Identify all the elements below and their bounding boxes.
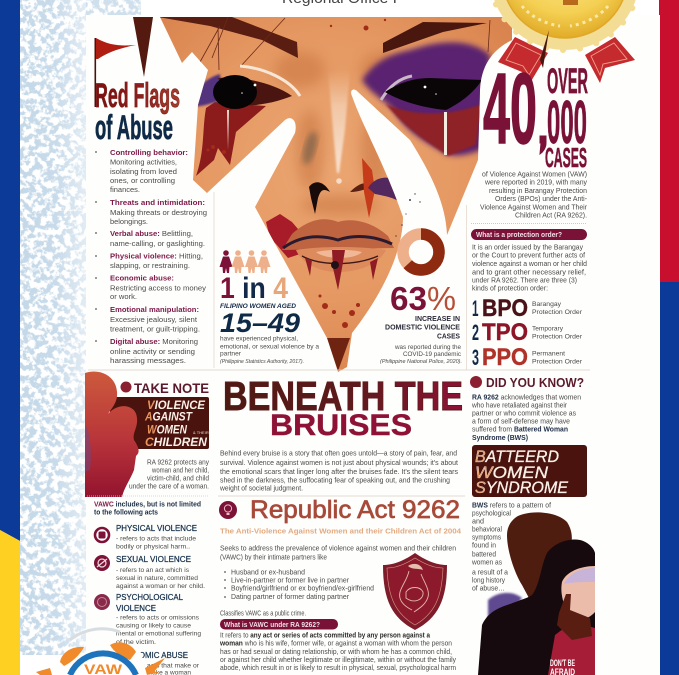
list of abuse types: Economic abuse: (110, 274, 174, 282)
chin tip (327, 338, 350, 371)
right eye bruise (362, 42, 490, 156)
shield with mother and child (383, 553, 447, 630)
BPO TPO PPO list: Protection Order (532, 334, 583, 340)
silhouette illustration (478, 512, 595, 675)
lips (282, 219, 394, 290)
BWS description: behavioral (472, 524, 502, 534)
BWS description: symptoms (472, 532, 501, 542)
text: OVER (547, 62, 588, 101)
stat: 1 in 4 women: emotional, or sexual violence by a (220, 344, 319, 350)
stat: 63 percent increase: DOMESTIC VIOLENCE (385, 322, 460, 332)
stat: 1 in 4 women: FILIPINO WOMEN AGED (220, 303, 296, 310)
pill: what is a protection order: What is a protection order? (476, 232, 562, 239)
protection order text: It is an order issued by the Barangay (472, 242, 583, 252)
BPO TPO PPO list: Protection Order (532, 309, 583, 316)
violence against women and children box: CHILDREN (145, 435, 207, 449)
column dividers (214, 192, 466, 370)
RA 9262 note: victim-child, and child (147, 474, 209, 482)
battered woman text: suffered from Battered Woman (472, 424, 568, 434)
panel: republic act 9262: The Anti-Violence Against Women and their Children Act of 2004 (220, 526, 461, 536)
icon: flag (94, 17, 153, 107)
heading: Red Flags (95, 77, 180, 115)
icon: four women (220, 250, 270, 273)
heading: DID YOU KNOW? (486, 375, 584, 390)
intro paragraph: Behind every bruise is a story that often goes untold—a story of pain, fear, and (220, 448, 457, 458)
stat: 63 percent increase: % (427, 280, 456, 317)
battered women syndrome box: WOMEN (475, 463, 549, 482)
BWS description: battered (472, 550, 496, 558)
list of abuse types: online activity or sending (110, 347, 195, 356)
violence against women and children box: VIOLENCE (147, 398, 206, 412)
protection order text: or the Court to prevent further acts of (472, 250, 585, 260)
physical violence (95, 523, 197, 550)
violence against women and children box: AGAINST (144, 410, 193, 424)
battered woman text: a form of self-defense may have (472, 416, 570, 426)
VAWC definition: or against her child whether legitimate or illegitimate, within or without the family (220, 655, 456, 664)
protection order text (472, 242, 587, 292)
intro paragraph: weight of societal judgment. (219, 484, 303, 492)
heading: take note: TAKE NOTE (134, 381, 209, 396)
protection order text: violence against a woman or her child (472, 259, 587, 268)
list of abuse types: finances. (110, 185, 140, 194)
psychological violence: PSYCHOLOGICAL (116, 592, 183, 602)
sexual violence: against a woman or her child. (116, 583, 205, 590)
blood on cheek (266, 214, 299, 258)
panel: red flags of abuse (94, 17, 207, 365)
stat: 1 in 4 women: have experienced physical, (220, 336, 298, 342)
intro paragraph: the emotional scars that linger long after the bruises fade. It's the silent tears (220, 467, 458, 476)
list of abuse types: Verbal abuse: Belittling, (110, 229, 193, 238)
list of abuse types: isolating from loved (110, 167, 177, 176)
RA 9262 note: RA 9262 protects any (147, 458, 209, 466)
BPO TPO PPO list: BPO (482, 295, 528, 322)
illustration: bruised face (150, 15, 520, 375)
economic abuse: ECONOMIC ABUSE (116, 650, 188, 660)
list of abuse types: ones, or controlling (110, 176, 175, 185)
list of partners: Boyfriend/girlfriend or ex boyfriend/ex-girlfriend (231, 584, 374, 592)
left eye bruise (188, 66, 300, 176)
panel: take note (85, 372, 209, 675)
battered woman text: who have retaliated against their (471, 400, 568, 410)
BPO TPO PPO list: PPO (482, 344, 528, 371)
stat: 63 percent increase: COVID-19 pandemic (403, 351, 462, 358)
economic abuse: - refers to acts that make or (116, 662, 200, 670)
stat: 1 in 4 women: (Philippine Statistics Authority, 2017). (220, 359, 304, 365)
BWS description: long history (472, 576, 505, 584)
sexual violence: - refers to an act which is (116, 567, 190, 574)
description (480, 170, 588, 220)
medal badge (490, 0, 640, 83)
pill: what is VAWC (220, 619, 338, 630)
list of abuse types: harassing messages. (110, 356, 186, 365)
stat: 63 percent increase: 63 (390, 280, 427, 317)
list of abuse types: Restricting access to money (110, 284, 206, 292)
list intro (94, 502, 201, 516)
list of partners: Classifies VAWC as a public crime. (220, 608, 306, 618)
psychological violence: causing or likely to cause (116, 622, 191, 630)
BWS description: BWS refers to a pattern of (472, 500, 551, 510)
stat: 1 in 4 women: 1 in 4 (220, 272, 288, 305)
silhouette illustration: DON'T BE (550, 658, 575, 668)
list of abuse types: Physical violence: Hitting, (110, 252, 203, 260)
BWS description: found in (472, 540, 496, 550)
paint specks (395, 193, 421, 237)
battered women syndrome box: BATTEERD (475, 447, 559, 466)
description: Orders (BPOs) under the Anti- (495, 194, 588, 203)
description: Children Act (RA 9262). (515, 210, 587, 220)
BWS description: of abuse… (472, 584, 505, 592)
list of partners: Live-in-partner or former live in partner (231, 576, 350, 584)
violence against women and children box (85, 372, 209, 497)
panel: republic act 9262: Republic Act 9262 (250, 496, 460, 524)
list of abuse types: Monitoring activities, (110, 158, 177, 166)
list of abuse types: Excessive jealousy, silent (110, 315, 197, 324)
panel: republic act 9262 (219, 496, 461, 672)
list intro: VAWC includes, but is not limited (94, 502, 201, 508)
stat: 63 percent increase (380, 234, 462, 365)
intro paragraph: survival. Violence against women is not just about physical wounds; it's about (220, 458, 458, 467)
BWS description: a result of a (472, 568, 508, 576)
BPO TPO PPO list: 2 (472, 320, 479, 345)
RA 9262 note: woman and her child, (151, 466, 209, 474)
left eyebrow (158, 17, 298, 58)
VAWC definition: It refers to any act or series of acts committed by any person against a (220, 630, 431, 640)
stat: 63 percent increase: CASES (437, 332, 460, 340)
battered woman text: partner or who commit violence as (472, 408, 576, 418)
violence against women and children box: & THEIR (193, 430, 209, 435)
intro paragraph (219, 448, 458, 492)
chin blood splatter (206, 19, 386, 328)
BPO TPO PPO list: Temporary (532, 326, 564, 332)
list of partners: Husband or ex-husband (231, 568, 305, 576)
VAWC definition: abode, which result in or is likely to result in physical, sexual, psychological harm (220, 663, 456, 672)
donut chart (403, 234, 439, 270)
battered women syndrome box (472, 445, 587, 497)
title: beneath the bruises: BENEATH THE (223, 373, 463, 419)
stat: 63 percent increase: was reported during the (394, 344, 461, 351)
pill: what is a protection order (471, 229, 587, 240)
BPO TPO PPO list: Protection Order (532, 358, 583, 366)
heading: of Abuse (95, 109, 173, 147)
stat: 1 in 4 women: partner (220, 350, 242, 358)
protection order text: kinds of protection order: (472, 284, 548, 292)
icon: light bulb (219, 501, 237, 519)
VAWC definition: has or had sexual or dating relationship, or with whom he has a common child, (220, 647, 452, 656)
list of abuse types (95, 148, 207, 365)
description: of Violence Against Women (VAW) (482, 170, 587, 178)
protection order text: and to grant other necessary relief, (472, 268, 586, 276)
violence against women and children box: WOMEN (147, 422, 187, 436)
psychological violence: mental or emotional suffering (116, 630, 201, 638)
list of partners: Dating partner of former dating partner (231, 592, 350, 601)
panel: 40,000 cases (471, 30, 588, 371)
list of abuse types: Digital abuse: Monitoring (110, 337, 198, 346)
protection order text: under RA 9262. There are three (3) (472, 276, 577, 284)
panel: republic act 9262: Seeks to address the prevalence of violence against women and their children (220, 544, 456, 552)
BPO TPO PPO list: Barangay (532, 301, 562, 308)
list of abuse types: or work. (110, 292, 137, 301)
title: beneath the bruises (223, 373, 463, 442)
battered women syndrome box: SYNDROME (475, 478, 569, 497)
BPO TPO PPO list: TPO (482, 319, 528, 346)
intro paragraph: shed in the darkness, the suffocating fear of speaking out, and the crushing (220, 476, 450, 484)
list of abuse types: slapping, or restraining. (110, 261, 190, 270)
BPO TPO PPO list: 1 (472, 296, 478, 321)
description: Violence Against Women and Their (480, 202, 588, 212)
list of partners (220, 568, 374, 618)
psychological violence: of the victim. (116, 639, 156, 646)
list intro: to the following acts (94, 510, 158, 516)
economic abuse (116, 650, 200, 675)
list of abuse types: Making threats or destroying (110, 208, 207, 217)
BPO TPO PPO list: Permanent (532, 350, 565, 358)
stat: 1 in 4 women: 15–49 (220, 308, 300, 338)
VAWC definition (219, 630, 456, 672)
psychological violence: - refers to acts or omissions (116, 614, 200, 622)
sexual violence (94, 554, 205, 590)
right eyebrow (383, 22, 487, 53)
text: 000 (547, 89, 587, 156)
list of abuse types: belongings. (110, 217, 148, 226)
description: were reported in 2019, with many (484, 178, 587, 186)
stat: 1 in 4 women (220, 250, 319, 365)
panel: republic act 9262: (VAWC) by their intimate partners like (220, 552, 327, 562)
BPO TPO PPO list (472, 295, 583, 371)
facial cracks (200, 17, 490, 142)
icon: alarm clock (36, 629, 165, 675)
psychological violence: VIOLENCE (116, 603, 156, 613)
big number: 40 (483, 53, 537, 165)
physical violence: PHYSICAL VIOLENCE (116, 523, 197, 533)
battered woman text: Syndrome (BWS) (472, 433, 529, 442)
heading (95, 77, 180, 147)
title: beneath the bruises: BRUISES (270, 409, 412, 442)
BWS description: women as (471, 558, 502, 566)
BWS description: and (472, 516, 484, 526)
battered woman text (471, 392, 581, 442)
list of abuse types: Threats and intimidation: (110, 198, 205, 207)
VAWC definition: woman who is his wife, former wife, or against a woman with whom the person (219, 638, 452, 648)
ribbons (498, 37, 635, 83)
physical violence: bodily or physical harm.. (116, 544, 190, 550)
list of abuse types: treatment, or guilt-tripping. (110, 324, 200, 334)
physical violence: - refers to acts that include (116, 536, 196, 542)
sexual violence: sexual in nature, committed (116, 575, 198, 582)
list of abuse types: Controlling behavior: (110, 148, 188, 157)
nose (300, 76, 397, 218)
BWS description: psychological (472, 508, 511, 518)
text: CASES (545, 142, 587, 173)
RA 9262 note (129, 458, 209, 490)
description: resulting in Barangay Protection (489, 186, 587, 195)
pill: what is VAWC: What is VAWC under RA 9262? (224, 622, 320, 629)
list of abuse types: name-calling, or gaslighting. (110, 239, 205, 248)
psychological violence (94, 592, 201, 646)
stat: 63 percent increase: INCREASE IN (415, 314, 460, 323)
BPO TPO PPO list: 3 (472, 345, 479, 370)
sexual violence: SEXUAL VIOLENCE (116, 554, 191, 564)
panel: did you know (470, 375, 595, 675)
RA 9262 note: under the care of a woman. (129, 482, 209, 490)
list of abuse types: Emotional manipulation: (110, 305, 199, 314)
battered woman text: RA 9262 acknowledges that women (472, 392, 581, 402)
stat: 63 percent increase: (Philippine National Police, 2020). (380, 359, 462, 365)
BWS description (471, 500, 551, 592)
